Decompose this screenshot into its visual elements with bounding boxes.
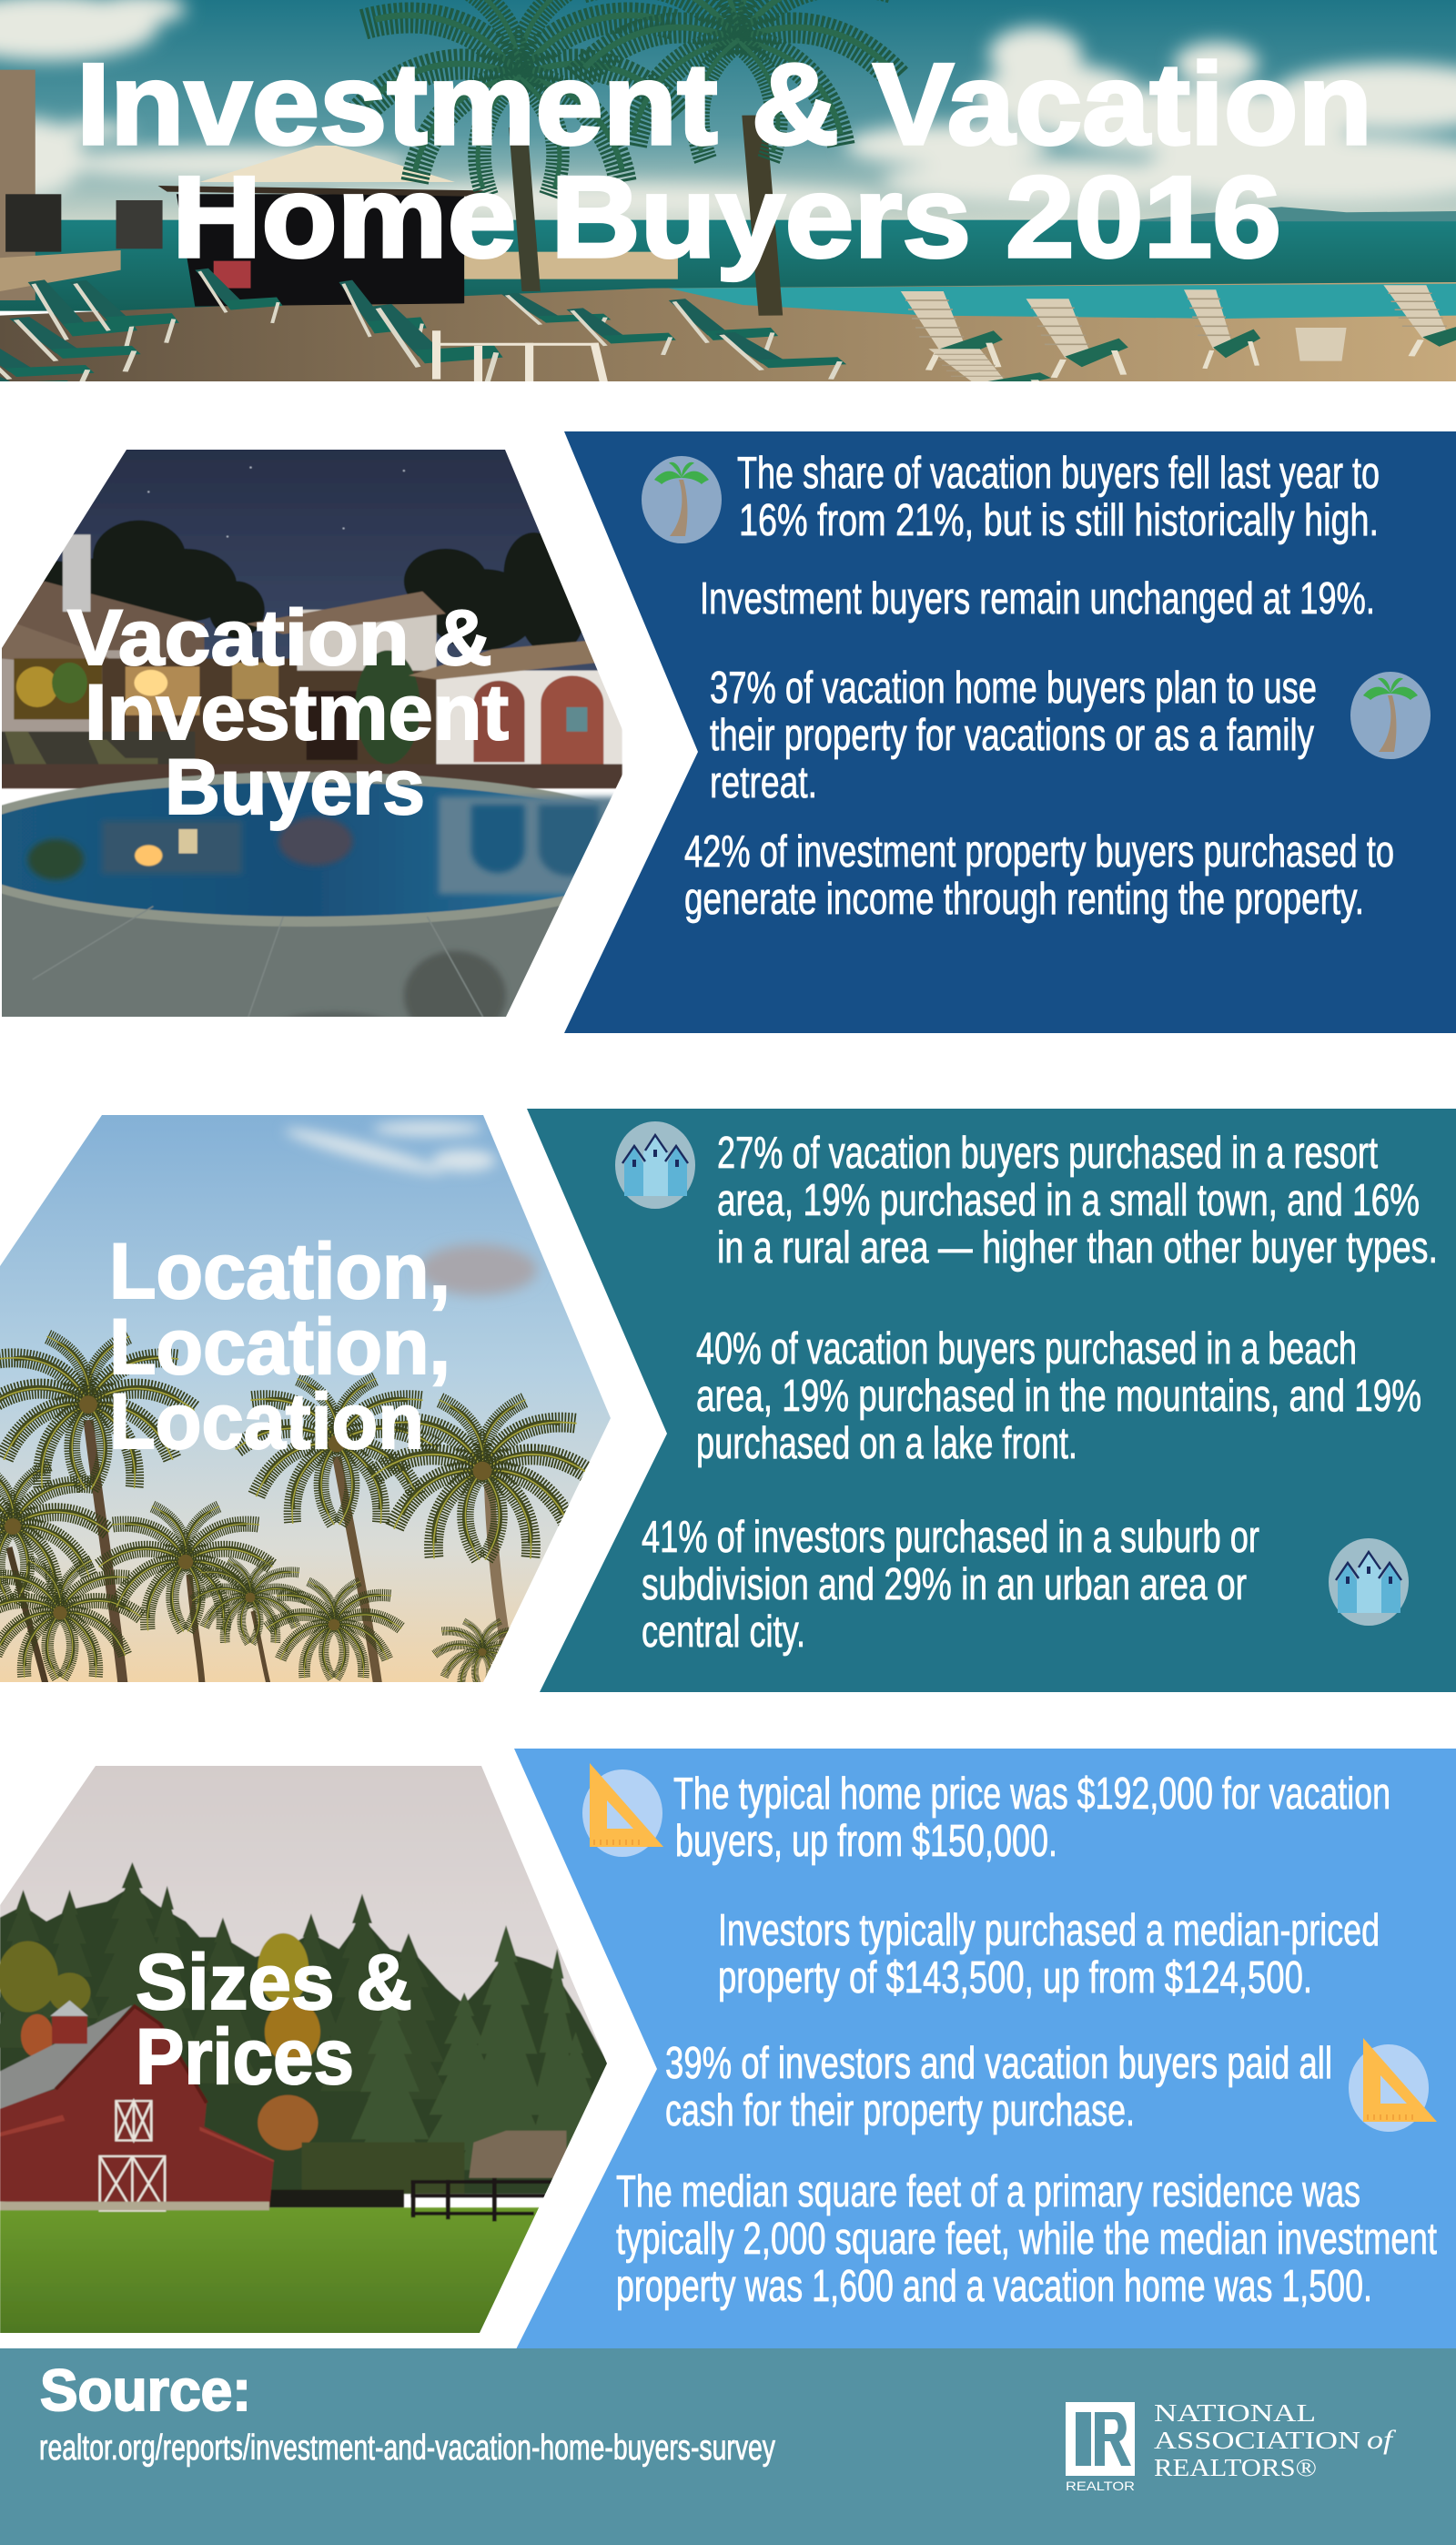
icon: houses [615,1121,695,1209]
logo: National Association of Realtors: REALTORS® [1154,2454,1317,2481]
hero banner: resort pool and beach photo with title [0,0,1456,399]
title [76,39,1372,281]
text: all cash buyers [665,2039,1332,2135]
text: suburb and urban: subdivision and 29% in an urban area or [642,1560,1247,1609]
arrow panel: light blue [514,1749,1456,2349]
panel: vacation and investment buyers [0,419,1456,1056]
logo: National Association of Realtors [1066,2399,1396,2493]
text: resort, small town, rural [717,1129,1438,1272]
icon: houses [1329,1538,1409,1626]
text: all cash buyers: cash for their property purchase. [665,2086,1135,2135]
footer band [0,2348,1456,2545]
heading: Sizes & Prices: Sizes & [136,1939,412,2026]
heading: Location, Location, Location: Location, [109,1228,450,1315]
heading: Sizes & Prices: Prices [136,2013,354,2101]
text: investor median price [718,1906,1380,2003]
logo: National Association of Realtors: ASSOCIATION [1154,2427,1360,2454]
text: vacation home price: buyers, up from $150,000. [675,1817,1057,1866]
hero photo [0,0,1456,399]
text: vacation home price [673,1769,1390,1866]
text: suburb and urban [642,1513,1259,1657]
heading: Vacation & Investment Buyers: Investment [85,669,509,756]
arrow panel: teal [527,1109,1456,1692]
photo: red barn and forest [0,1766,607,2333]
logo: National Association of Realtors: of [1367,2425,1396,2455]
title: Investment & Vacation [76,39,1372,168]
text: beach, mountains, lake [696,1324,1421,1468]
heading: Sizes & Prices [136,1939,412,2101]
icon: palm tree [642,456,722,543]
icon: set square ruler [582,1763,663,1857]
logo: National Association of Realtors: REALTOR [1066,2479,1135,2493]
photo: palm trees at sunset [0,1110,637,1693]
source heading: Source: [40,2357,251,2423]
photo: villa with pool at night [2,450,622,1017]
heading: Vacation & Investment Buyers: Vacation & [67,594,492,682]
heading: Vacation & Investment Buyers [67,594,509,831]
text: suburb and urban: 41% of investors purchased in a suburb or [642,1513,1259,1562]
text: beach, mountains, lake: purchased on a lake front. [696,1419,1077,1468]
heading: Location, Location, Location [109,1228,450,1465]
title: Home Buyers 2016 [172,152,1281,281]
panel: location [0,1109,1456,1693]
heading: Location, Location, Location: Location, [109,1303,450,1391]
icon: set square ruler [1349,2038,1437,2132]
text: vacation home plans [710,664,1317,807]
text: median square feet [616,2167,1437,2311]
text: share of vacation buyers [737,449,1380,545]
arrow panel: dark blue [564,431,1456,1033]
source url: realtor.org/reports/investment-and-vacation-home-buyers-survey [39,2428,775,2468]
logo: National Association of Realtors: NATIONAL [1154,2399,1316,2427]
text: suburb and urban: central city. [642,1607,805,1657]
heading: Vacation & Investment Buyers: Buyers [165,744,425,831]
text: rental income [684,827,1394,924]
panel: sizes and prices [0,1748,1456,2349]
icon: palm tree [1350,672,1431,759]
text: vacation home plans: retreat. [710,758,817,807]
heading: Location, Location, Location: Location [109,1378,424,1465]
